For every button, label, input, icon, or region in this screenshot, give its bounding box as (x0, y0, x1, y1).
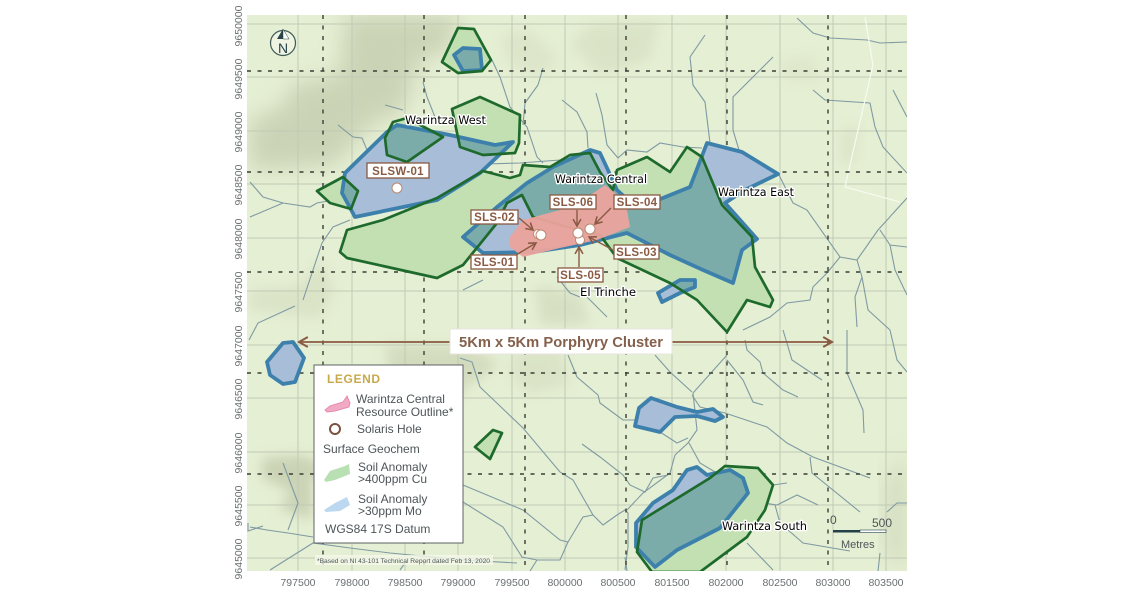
y axis labels: 9647500 (233, 271, 245, 312)
cluster extent arrow: 5Km x 5Km Porphyry Cluster (459, 335, 663, 351)
x axis labels: 799500 (494, 577, 530, 589)
hole labels: SLS-02 (474, 212, 515, 224)
y axis labels: 9648000 (233, 218, 245, 259)
x axis labels: 800000 (547, 577, 583, 589)
x axis labels: 802000 (708, 577, 744, 589)
legend: Warintza Central (356, 392, 445, 406)
cluster extent arrow (299, 329, 832, 354)
hole labels: SLS-05 (560, 270, 601, 282)
x axis labels: 799000 (440, 577, 476, 589)
hole labels: SLS-03 (616, 247, 657, 259)
north arrow (270, 29, 296, 56)
site labels (405, 113, 807, 533)
y axis labels: 9645500 (233, 485, 245, 526)
site labels: El Trinche (580, 285, 636, 299)
x axis labels: 802500 (762, 577, 798, 589)
y axis labels: 9649000 (233, 111, 245, 152)
x axis labels: 798500 (387, 577, 423, 589)
legend: Resource Outline* (356, 405, 454, 419)
footnote: *Based on NI 43-101 Technical Report dated Feb 13, 2020 (317, 558, 490, 565)
y axis labels: 9650000 (233, 5, 245, 46)
y axis labels: 9649500 (233, 58, 245, 99)
hole labels: SLS-01 (474, 257, 515, 269)
x axis labels (280, 577, 904, 589)
y axis labels (233, 5, 245, 579)
x axis labels: 797500 (280, 577, 316, 589)
hole labels: SLSW-01 (372, 166, 424, 178)
x axis labels: 803000 (815, 577, 851, 589)
dashed grid lines (247, 15, 907, 571)
scale bar: Metres (841, 539, 875, 551)
legend: >30ppm Mo (358, 504, 422, 518)
scale bar: 500 (872, 516, 892, 530)
legend: Surface Geochem (323, 442, 420, 456)
molybdenum anomaly outlines (267, 48, 778, 567)
legend: Solaris Hole (357, 422, 422, 436)
site labels: Warintza Central (555, 172, 647, 186)
site labels: Warintza East (718, 185, 794, 199)
copper anomaly outlines (317, 28, 773, 572)
x axis labels: 801500 (654, 577, 690, 589)
legend: LEGEND (327, 372, 381, 386)
map panel (247, 15, 907, 572)
solid grid lines (247, 15, 907, 571)
footnote (315, 555, 493, 565)
x axis labels: 800500 (600, 577, 636, 589)
y axis labels: 9646000 (233, 432, 245, 473)
legend: Soil Anomaly (358, 460, 427, 474)
overlap fills (342, 48, 778, 567)
legend: >400ppm Cu (358, 472, 427, 486)
scale bar: 0 (830, 513, 837, 527)
y axis labels: 9646500 (233, 378, 245, 419)
molybdenum anomaly fills (269, 136, 774, 538)
legend: WGS84 17S Datum (325, 522, 430, 536)
white boundary line (845, 17, 900, 202)
terrain shading (250, 15, 907, 571)
scale bar (830, 513, 892, 551)
resource outline (510, 185, 630, 257)
y axis labels: 9645000 (233, 538, 245, 579)
y axis labels: 9647000 (233, 325, 245, 366)
hole labels: SLS-06 (553, 197, 593, 209)
drill holes and arrows (392, 183, 613, 267)
site labels: Warintza West (405, 113, 486, 127)
copper anomaly fills (317, 28, 773, 572)
legend: Soil Anomaly (358, 492, 427, 506)
rivers (248, 18, 907, 571)
hole labels (367, 163, 660, 282)
hole labels: SLS-04 (617, 197, 658, 209)
x axis labels: 803500 (868, 577, 904, 589)
north arrow: N (278, 40, 288, 56)
legend (314, 365, 463, 543)
x axis labels: 798000 (334, 577, 370, 589)
y axis labels: 9648500 (233, 164, 245, 205)
site labels: Warintza South (722, 519, 807, 533)
